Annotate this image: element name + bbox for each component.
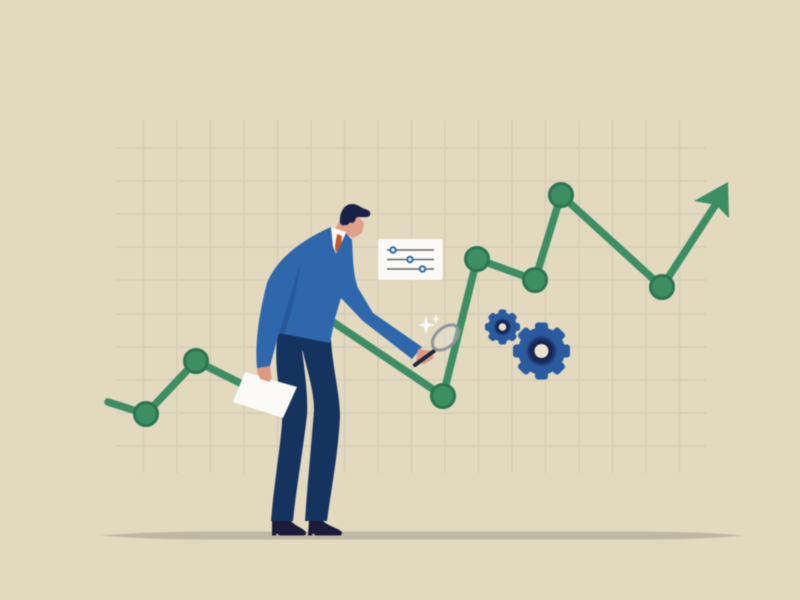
large gear bbox=[513, 322, 570, 380]
gripping hand bbox=[416, 349, 434, 364]
grid background bbox=[116, 120, 706, 473]
sheet of paper bbox=[233, 372, 297, 418]
settings slider card bbox=[378, 239, 442, 280]
shirt collar bbox=[331, 227, 346, 254]
left shoe bbox=[272, 521, 306, 536]
magnifying glass bbox=[415, 320, 463, 365]
hand holding paper bbox=[257, 366, 272, 383]
trousers bbox=[271, 333, 340, 521]
neck and face bbox=[334, 212, 364, 240]
hair bbox=[340, 204, 370, 225]
ground shadow bbox=[101, 532, 743, 540]
sparkle icons bbox=[418, 314, 440, 335]
small gear bbox=[485, 310, 520, 344]
chart nodes bbox=[134, 184, 674, 426]
arrow head bbox=[694, 182, 729, 218]
sweater fold shadow bbox=[279, 262, 300, 334]
right shoe bbox=[308, 521, 342, 536]
tie bbox=[335, 234, 342, 253]
rising line chart with arrow bbox=[108, 182, 729, 426]
businessman figure bbox=[233, 204, 463, 536]
sweater with arm bbox=[256, 227, 422, 368]
